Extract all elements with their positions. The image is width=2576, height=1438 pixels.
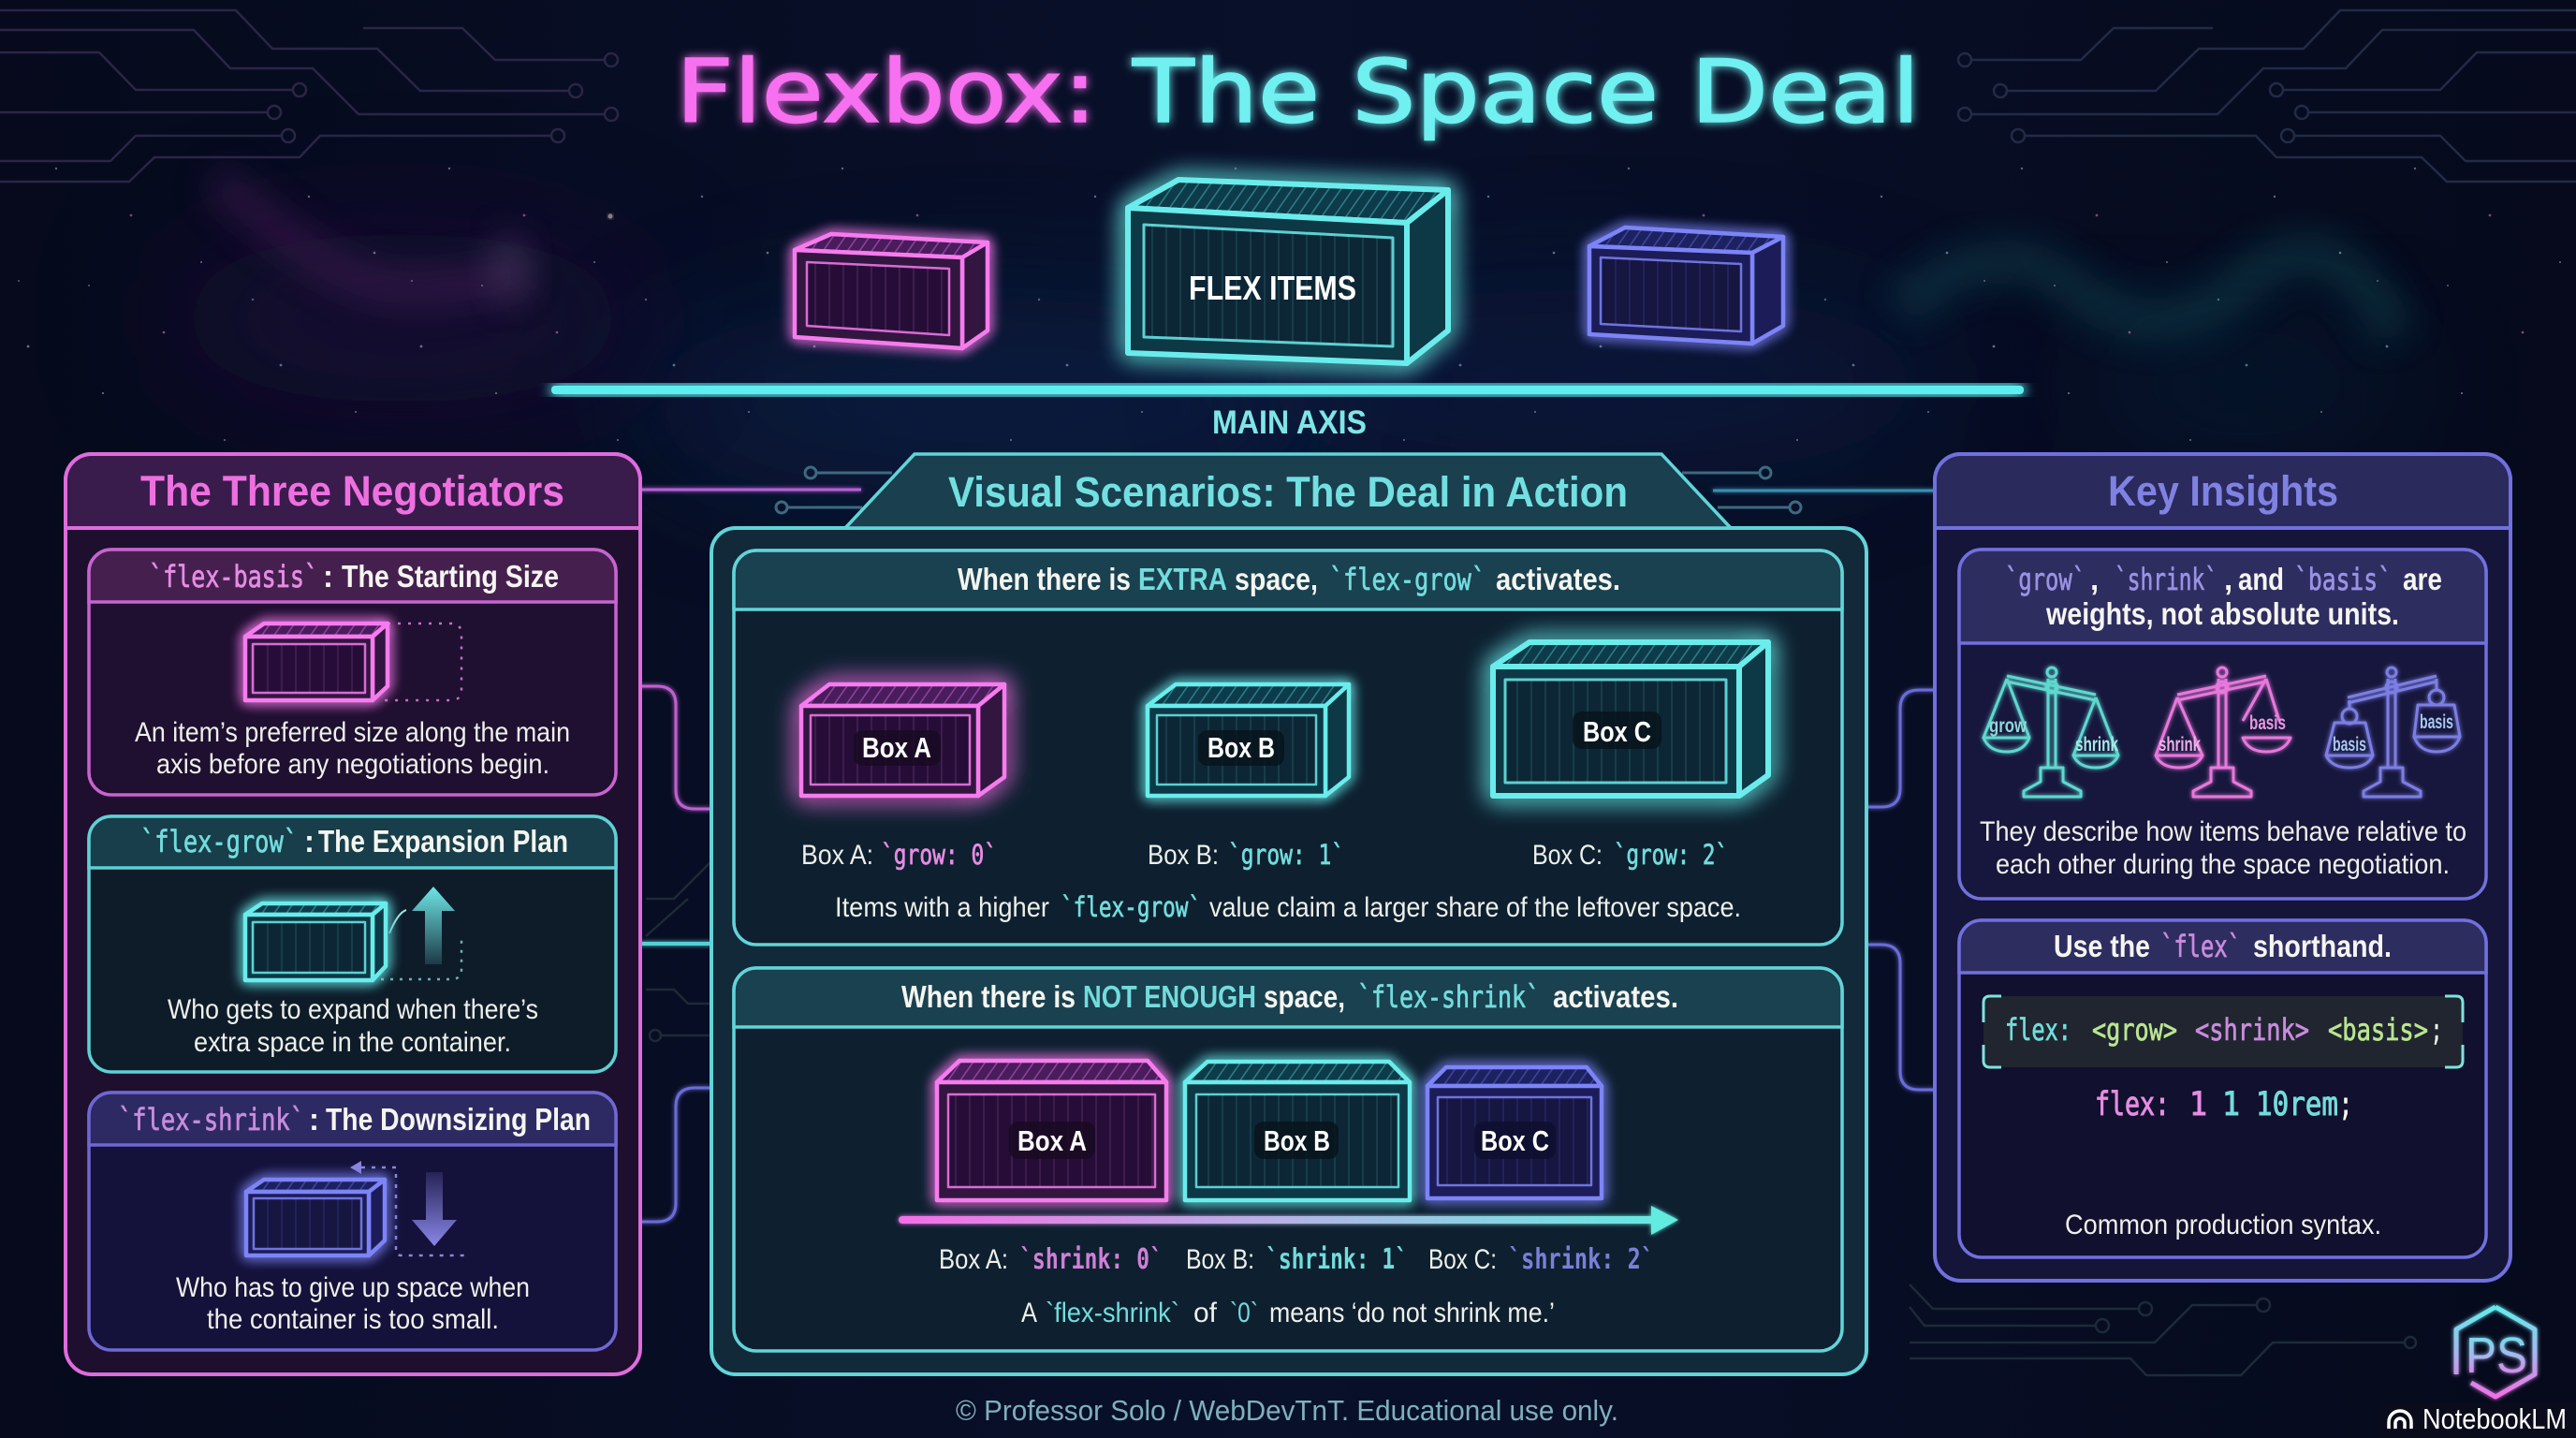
panel heading: negotiators: [66, 454, 640, 528]
heading: weights: `basis`: [2294, 562, 2392, 597]
code block: syntax: ;: [2431, 1012, 2442, 1048]
flex item box: pink: [795, 234, 988, 348]
code example: 10rem: [2256, 1086, 2338, 1123]
shrink captions: Box A:: [939, 1244, 1008, 1275]
heading: weights: and: [2238, 562, 2284, 596]
grow captions: `grow: 0`: [881, 839, 997, 871]
icon: ps logo: PS: [2466, 1328, 2527, 1384]
code example: 1: [2189, 1086, 2207, 1123]
heading: shorthand: shorthand.: [2253, 929, 2392, 963]
heading: not enough space: NOT ENOUGH: [1083, 979, 1256, 1014]
shrink captions: Box B:: [1186, 1244, 1254, 1275]
shrink captions: [939, 1243, 1654, 1276]
heading: extra space: activates.: [1496, 562, 1620, 596]
circuit traces: top left: [0, 10, 618, 182]
grow captions: [801, 839, 1728, 871]
card: flex-grow: [89, 816, 616, 1072]
heading: extra space: [958, 562, 1620, 597]
shrink captions: Box C:: [1428, 1244, 1497, 1275]
shrink captions: `shrink: 0`: [1019, 1243, 1163, 1276]
grow note: `flex-grow`: [1061, 891, 1201, 923]
title: Flexbox:: [676, 41, 1097, 142]
icon: purple scale: basis: [2420, 712, 2453, 733]
shrink note: of: [1193, 1298, 1218, 1328]
box c shrink: [1427, 1067, 1602, 1198]
flex item box: teal with label: FLEX ITEMS: [1189, 269, 1356, 307]
card: flex-shrink: [89, 1093, 616, 1350]
panel heading: key insights: Key Insights: [2108, 467, 2338, 515]
code block: syntax: [1983, 996, 2463, 1067]
card: flex-grow: Who gets to expand when there’s: [168, 994, 538, 1025]
card: weights: each other during the space negotiation.: [1996, 849, 2450, 880]
card: flex-basis: An item’s preferred size along the main: [135, 717, 570, 748]
heading: shorthand: `flex`: [2160, 929, 2241, 964]
box a shrink: [937, 1061, 1166, 1200]
heading: shorthand: Use the: [2054, 929, 2150, 963]
icon: purple scale: basis: [2333, 734, 2366, 756]
card: flex-shrink: `flex-shrink`: [118, 1102, 304, 1137]
card: flex-basis: :: [323, 559, 333, 594]
shrink note: means ‘do not shrink me.’: [1269, 1298, 1555, 1328]
heading: weights: `grow`: [2005, 562, 2086, 597]
grow captions: Box B:: [1148, 840, 1219, 871]
heading: not enough space: [901, 979, 1678, 1015]
panel heading tab: visual scenarios: [845, 454, 1731, 528]
panel heading tab: visual scenarios: Visual Scenarios: The Deal in Action: [948, 468, 1628, 516]
card: flex-shrink: the container is too small.: [207, 1304, 499, 1335]
heading: extra space: `flex-grow`: [1329, 562, 1486, 597]
panel: the three negotiators: [66, 454, 640, 1374]
card: flex-basis: axis before any negotiations begin.: [156, 749, 549, 780]
grow note: Items with a higher: [835, 892, 1049, 923]
flex item box: blue: [1589, 227, 1783, 344]
icon: shrink box and down arrow: [246, 1161, 464, 1255]
card: flex-basis: The Starting Size: [342, 559, 559, 594]
card: flex-grow: extra space in the container.: [194, 1027, 511, 1058]
heading: weights: are: [2403, 562, 2442, 596]
code example: 1: [2222, 1086, 2240, 1123]
icon: grow box and up arrow: [245, 887, 461, 980]
code example: [2095, 1086, 2352, 1123]
code example: ;: [2339, 1086, 2352, 1123]
connectors between panels: [640, 490, 1935, 1222]
box b grow: [1148, 684, 1349, 796]
icon: teal scale: [1983, 668, 2118, 797]
title: [676, 41, 1920, 142]
code block: syntax: flex:: [2005, 1012, 2071, 1048]
icon: ps logo: [2456, 1307, 2535, 1397]
heading: not enough space: space,: [1264, 979, 1345, 1014]
card: extra space: [734, 550, 1842, 945]
main axis label: MAIN AXIS: [1212, 404, 1367, 441]
card: flex-grow: The Expansion Plan: [318, 824, 568, 858]
card: flex-shrink: Who has to give up space when: [176, 1272, 530, 1303]
card: not enough space: [734, 968, 1842, 1351]
shrink note: [1021, 1298, 1555, 1328]
heading: extra space: space,: [1235, 562, 1318, 596]
icon: teal scale: grow: [1989, 715, 2027, 737]
panel: key insights: [1935, 454, 2510, 1281]
shrink captions: `shrink: 2`: [1508, 1243, 1654, 1276]
card: flex-grow: :: [304, 824, 315, 858]
grow captions: `grow: 2`: [1614, 839, 1728, 871]
icon: pink scale: shrink: [2159, 734, 2201, 756]
shrink note: A: [1021, 1298, 1037, 1328]
panel heading: negotiators: The Three Negotiators: [140, 467, 564, 515]
icon: purple scale: [2326, 668, 2460, 797]
card: flex-grow: `flex-grow`: [140, 824, 298, 859]
shrink captions: `shrink: 1`: [1266, 1243, 1408, 1276]
footer credit: © Professor Solo / WebDevTnT. Educational use only.: [956, 1394, 1618, 1427]
card: flex-shrink: The Downsizing Plan: [326, 1102, 591, 1137]
circuit traces: bottom right: [646, 861, 2416, 1375]
heading: extra space: EXTRA: [1138, 562, 1227, 596]
icon: basis box: [245, 624, 461, 700]
shrink note: `flex-shrink`: [1046, 1298, 1179, 1328]
code block: syntax: <shrink>: [2195, 1012, 2309, 1048]
heading: weights: ,: [2090, 562, 2099, 596]
icon: pink scale: [2156, 668, 2291, 797]
arrow: shrink axis: [899, 1206, 1678, 1235]
box a grow: Box A: [862, 731, 931, 764]
circuit traces: top right: [1958, 10, 2576, 182]
card: flex-basis: `flex-basis`: [149, 559, 318, 594]
box c grow: [1493, 642, 1768, 796]
heading: not enough space: `flex-shrink`: [1357, 979, 1540, 1015]
code block: syntax: <basis>: [2328, 1012, 2428, 1048]
grow note: value claim a larger share of the leftover space.: [1209, 892, 1741, 923]
grow captions: `grow: 1`: [1228, 839, 1344, 871]
heading: weights: ,: [2224, 562, 2232, 596]
panel heading: key insights: [1935, 454, 2510, 528]
heading: weights: weights, not absolute units.: [2045, 596, 2399, 631]
heading: extra space: When there is: [958, 562, 1131, 596]
box b shrink: [1185, 1062, 1410, 1200]
box b shrink: Box B: [1264, 1124, 1330, 1157]
card: flex-basis: [89, 550, 616, 795]
card: flex-shrink: :: [309, 1102, 319, 1137]
heading: weights: [2005, 562, 2442, 631]
heading: not enough space: When there is: [901, 979, 1076, 1014]
code example: flex:: [2095, 1086, 2170, 1123]
icon: teal scale: shrink: [2075, 734, 2118, 756]
heading: weights: `shrink`: [2115, 562, 2217, 597]
shrink note: `0`: [1230, 1298, 1258, 1328]
grow note: [835, 891, 1741, 923]
flex item box: teal with label: [1128, 180, 1448, 363]
heading: shorthand: [2054, 929, 2392, 964]
tab side nodes: [776, 467, 1801, 513]
box a grow: [801, 684, 1004, 796]
box a shrink: Box A: [1017, 1124, 1087, 1157]
box c grow: Box C: [1583, 715, 1651, 748]
panel: visual scenarios: [711, 454, 1866, 1374]
card: flex shorthand: Common production syntax.: [2065, 1210, 2381, 1240]
box c shrink: Box C: [1481, 1124, 1549, 1157]
grow captions: Box C:: [1532, 840, 1603, 871]
grow captions: Box A:: [801, 840, 873, 871]
icon: pink scale: basis: [2249, 712, 2286, 734]
box b grow: Box B: [1208, 731, 1275, 764]
card: weights: They describe how items behave relative to: [1980, 816, 2466, 847]
heading: not enough space: activates.: [1553, 979, 1678, 1014]
title: The Space Deal: [1132, 41, 1920, 142]
card: weights: [1959, 550, 2486, 899]
card: flex shorthand: [1959, 920, 2486, 1257]
code block: syntax: <grow>: [2092, 1012, 2177, 1048]
main axis line: [551, 386, 2024, 394]
